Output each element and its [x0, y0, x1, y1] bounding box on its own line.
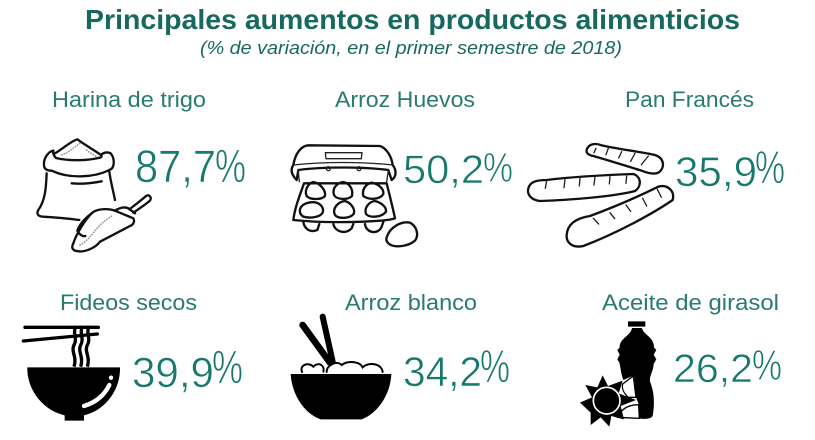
value: 39,9%	[132, 340, 243, 397]
icon: flour sack and scoop	[37, 139, 151, 251]
title: Principales aumentos en productos alimenticios	[85, 4, 740, 35]
icon: baguettes	[528, 144, 673, 247]
value: 50,2%: %	[483, 144, 513, 191]
icon: rice bowl with chopsticks	[291, 317, 391, 419]
label: Pan Francés: Pan Francés	[625, 87, 754, 112]
value: 50,2%	[403, 144, 513, 192]
label: Arroz Huevos: Arroz Huevos	[335, 87, 475, 112]
value: 34,2%: 34,2	[403, 348, 482, 395]
value: 34,2%: %	[480, 340, 510, 392]
value: 50,2%: 50,2	[403, 148, 484, 192]
value: 35,9%: %	[755, 141, 785, 193]
icon: noodle bowl	[23, 326, 120, 421]
label: Harina de trigo: Harina de trigo	[52, 87, 206, 112]
value: 39,9%: 39,9	[132, 349, 214, 397]
value: 87,7%: 87,7	[135, 141, 216, 192]
value: 39,9%: %	[212, 340, 243, 393]
icon: oil bottle and sunflower	[580, 321, 656, 427]
icon: egg carton	[292, 145, 417, 246]
value: 35,9%	[675, 141, 785, 195]
label: Aceite de girasol: Aceite de girasol	[602, 290, 779, 315]
value: 34,2%	[403, 340, 510, 395]
label: Fideos secos: Fideos secos	[60, 290, 197, 315]
value: 26,2%: %	[752, 342, 782, 390]
value: 26,2%	[673, 342, 782, 391]
value: 87,7%: %	[215, 139, 246, 192]
value: 35,9%: 35,9	[675, 148, 757, 195]
label: Arroz blanco: Arroz blanco	[345, 290, 477, 315]
subtitle: (% de variación, en el primer semestre de 2018)	[200, 38, 622, 58]
value: 26,2%: 26,2	[673, 347, 753, 391]
